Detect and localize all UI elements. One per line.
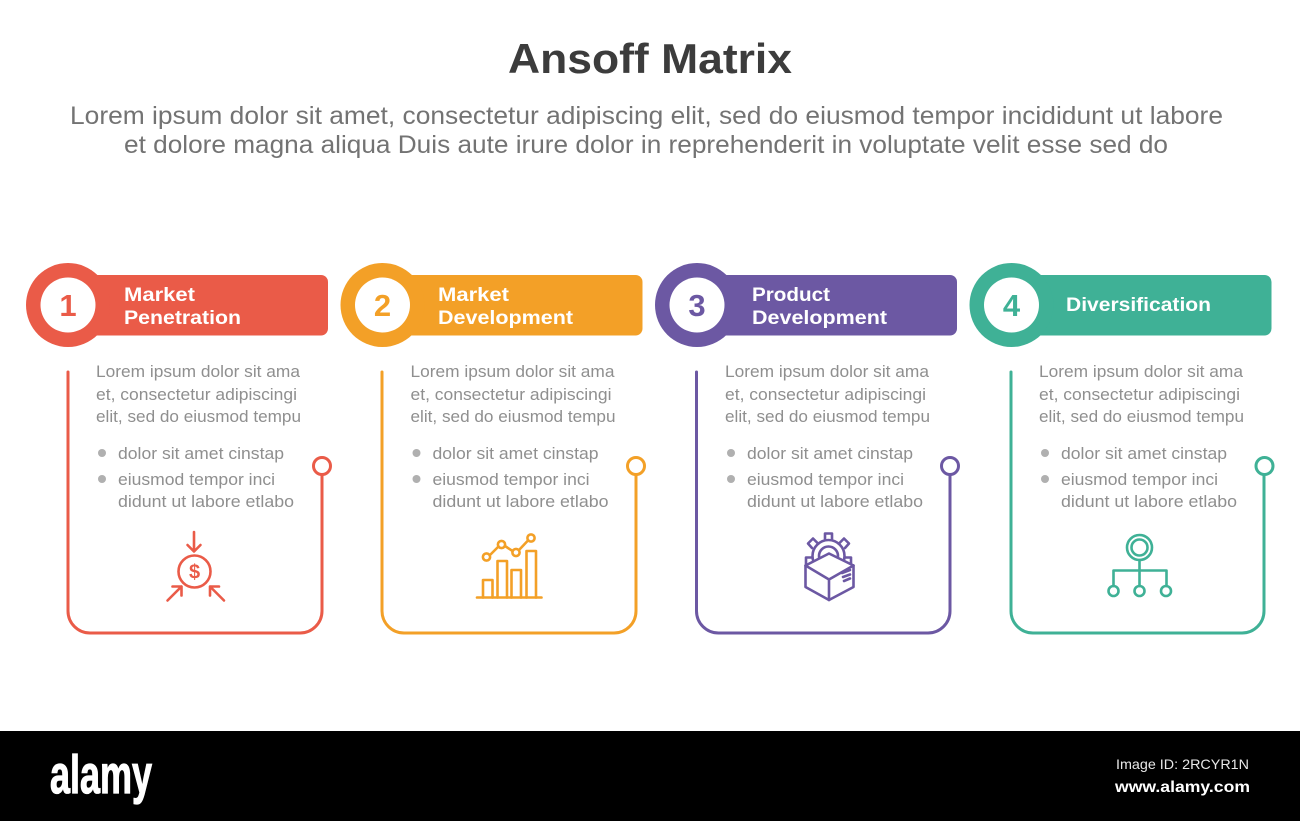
icon: hierarchy network — [1108, 535, 1171, 596]
bullet list: didunt ut labore etlabo — [432, 492, 608, 511]
header: product development — [655, 263, 957, 347]
header: market penetration: Market — [124, 285, 196, 306]
header: product development: Development — [752, 308, 888, 329]
bullet list: dolor sit amet cinstap — [432, 444, 598, 463]
header: market penetration: 1 — [59, 288, 77, 323]
description text — [1039, 362, 1244, 426]
description text — [725, 362, 930, 426]
icon: dollar with arrows: $ — [189, 562, 200, 584]
description text: Lorem ipsum dolor sit ama — [725, 362, 930, 381]
header: market development — [340, 263, 642, 347]
panel: market penetration — [26, 263, 330, 633]
alamy logo: alamy — [50, 745, 152, 805]
subtitle text: Lorem ipsum dolor sit amet, consectetur adipiscing elit, sed do eiusmod tempor incididunt ut labore — [70, 102, 1223, 130]
image id: Image ID: 2RCYR1N — [1116, 756, 1249, 772]
outline frame — [696, 372, 958, 633]
bullet list: dolor sit amet cinstap — [747, 444, 913, 463]
header: product development: 3 — [688, 288, 706, 323]
bullet list: eiusmod tempor inci — [1061, 470, 1218, 489]
bullet list: eiusmod tempor inci — [747, 470, 904, 489]
outline frame — [382, 372, 644, 633]
description text: et, consectetur adipiscingi — [410, 385, 612, 404]
description text: et, consectetur adipiscingi — [725, 385, 926, 404]
description text — [410, 362, 616, 426]
panel: diversification — [970, 263, 1273, 633]
bullet list — [98, 444, 294, 511]
bullet list: eiusmod tempor inci — [118, 470, 275, 489]
description text: et, consectetur adipiscingi — [96, 385, 297, 404]
outline frame — [1011, 372, 1273, 633]
description text: Lorem ipsum dolor sit ama — [1039, 362, 1244, 381]
header: market development: 2 — [374, 288, 391, 323]
description text — [96, 362, 301, 426]
title: Ansoff Matrix — [508, 35, 793, 82]
icon: bar chart with trend line — [477, 534, 542, 598]
outline frame — [68, 372, 330, 633]
header: market penetration: Penetration — [124, 308, 241, 329]
bullet list: dolor sit amet cinstap — [1061, 444, 1227, 463]
header: market development: Development — [438, 308, 574, 329]
footer band — [0, 731, 1300, 821]
header: diversification: Diversification — [1066, 295, 1211, 316]
subtitle text: et dolore magna aliqua Duis aute irure dolor in reprehenderit in voluptate velit esse sed do — [124, 131, 1168, 159]
panel: market development — [340, 263, 644, 633]
website: www.alamy.com — [1114, 779, 1250, 796]
bullet list: didunt ut labore etlabo — [1061, 492, 1237, 511]
panel: product development — [655, 263, 958, 633]
bullet list — [1041, 444, 1237, 511]
icon: box with gear — [806, 534, 854, 600]
description text: elit, sed do eiusmod tempu — [725, 407, 930, 426]
header: product development: Product — [752, 285, 831, 306]
description text: elit, sed do eiusmod tempu — [410, 407, 616, 426]
icon: dollar with arrows — [168, 532, 224, 600]
header: diversification: 4 — [1003, 288, 1021, 323]
bullet list: didunt ut labore etlabo — [118, 492, 294, 511]
description text: elit, sed do eiusmod tempu — [96, 407, 301, 426]
header: diversification — [970, 263, 1272, 347]
description text: Lorem ipsum dolor sit ama — [96, 362, 301, 381]
header: market penetration — [26, 263, 328, 347]
bullet list — [727, 444, 923, 511]
description text: Lorem ipsum dolor sit ama — [410, 362, 615, 381]
bullet list: dolor sit amet cinstap — [118, 444, 284, 463]
description text: et, consectetur adipiscingi — [1039, 385, 1240, 404]
header: market development: Market — [438, 285, 510, 306]
bullet list — [412, 444, 608, 511]
subtitle text — [70, 102, 1223, 159]
bullet list: didunt ut labore etlabo — [747, 492, 923, 511]
bullet list: eiusmod tempor inci — [432, 470, 590, 489]
description text: elit, sed do eiusmod tempu — [1039, 407, 1244, 426]
